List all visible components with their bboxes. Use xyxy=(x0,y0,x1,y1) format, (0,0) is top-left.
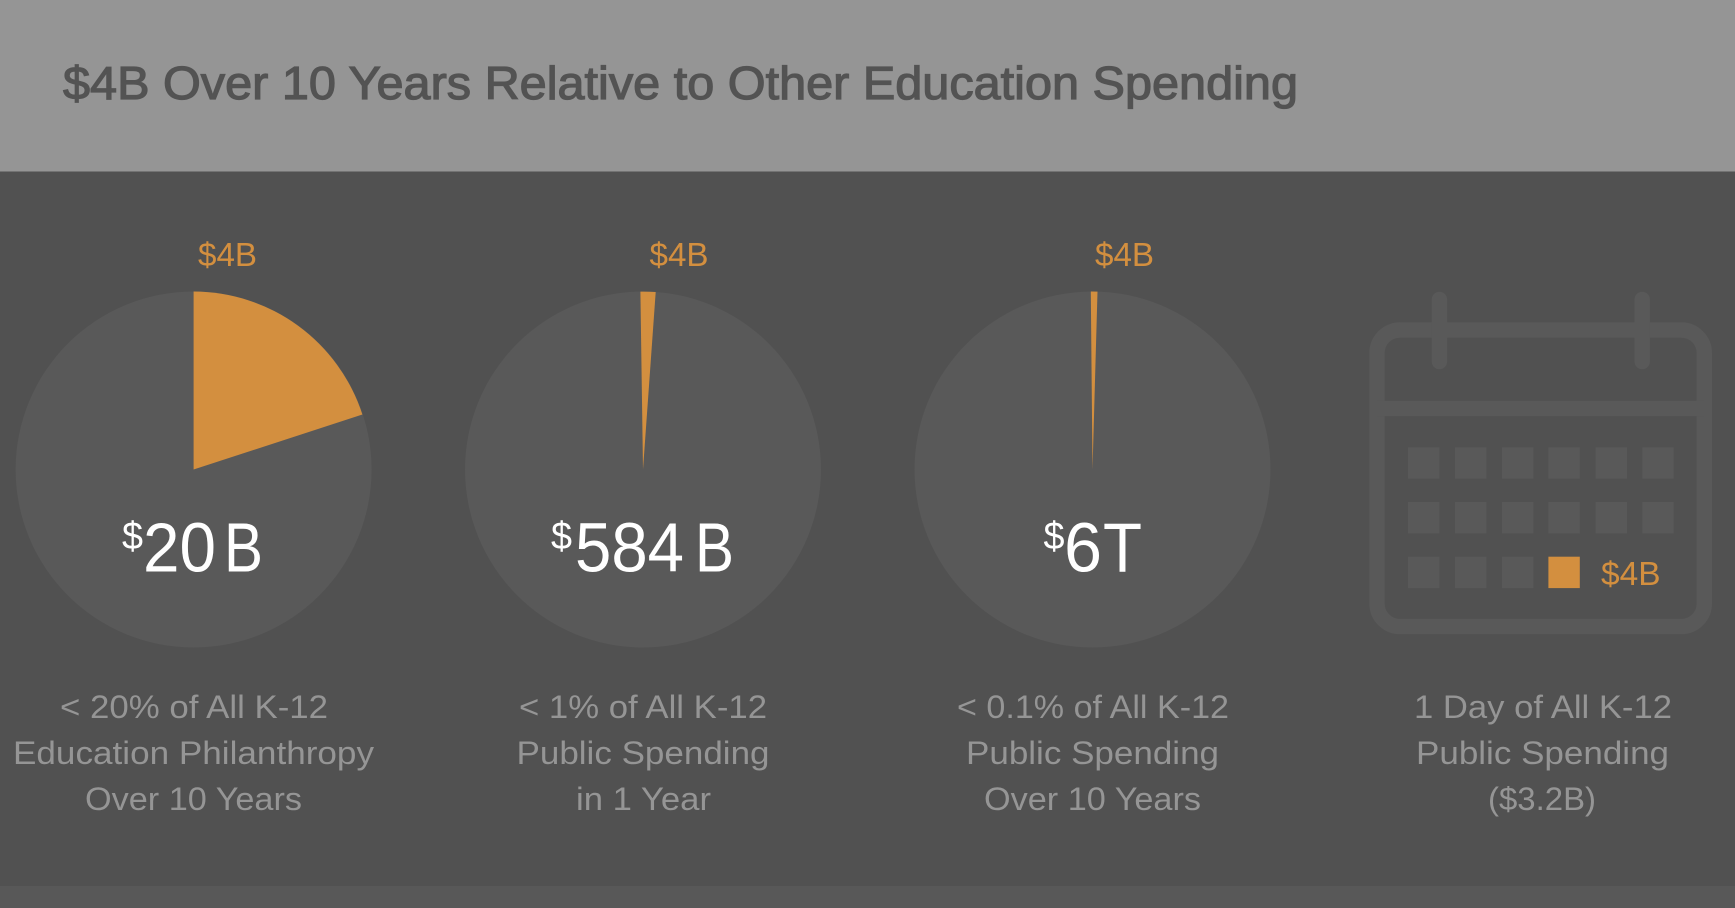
caption xyxy=(13,689,374,817)
value $584 B: $ xyxy=(551,515,572,558)
calendar day squares xyxy=(1408,447,1674,588)
value $584 B: B xyxy=(695,508,734,586)
panel: calendar xyxy=(1377,299,1704,817)
value $20 B: B xyxy=(224,508,263,586)
value $6T xyxy=(1044,508,1142,586)
$4B label: $4B xyxy=(650,236,708,273)
$4B label: $4B xyxy=(1601,555,1660,592)
caption: 1 Day of All K-12 xyxy=(1414,689,1672,725)
caption: Public Spending xyxy=(1416,735,1669,771)
pie base xyxy=(914,292,1270,648)
caption: Over 10 Years xyxy=(85,781,302,817)
panel: $20B pie chart xyxy=(13,236,374,817)
caption: < 1% of All K-12 xyxy=(519,689,767,725)
orange wedge 1% xyxy=(640,292,656,470)
$4B label: $4B xyxy=(1095,236,1154,273)
header band xyxy=(0,0,1735,172)
caption xyxy=(957,689,1229,817)
pie base xyxy=(16,292,372,648)
caption: < 20% of All K-12 xyxy=(60,689,328,725)
value $20 B: 20 xyxy=(143,508,216,586)
value $20 B xyxy=(122,508,263,586)
highlighted day square xyxy=(1548,557,1580,588)
value $584 B: 584 xyxy=(575,508,684,586)
panel: $584B pie chart xyxy=(465,236,821,817)
caption: < 0.1% of All K-12 xyxy=(957,689,1229,725)
caption: Public Spending xyxy=(966,735,1219,771)
value $584 B xyxy=(551,508,734,586)
caption: in 1 Year xyxy=(576,781,711,817)
value $6T: 6 xyxy=(1064,508,1102,586)
caption: Education Philanthropy xyxy=(13,735,374,771)
value $6T: T xyxy=(1103,508,1142,586)
$4B label: $4B xyxy=(198,236,257,273)
title: $4B Over 10 Years Relative to Other Education Spending xyxy=(63,57,1298,109)
icon: calendar frame xyxy=(1377,299,1704,627)
panel: $6T pie chart xyxy=(914,236,1270,817)
bottom band xyxy=(0,886,1735,908)
caption: Public Spending xyxy=(516,735,770,771)
orange wedge 0.1% xyxy=(1091,291,1098,470)
caption xyxy=(516,689,770,817)
value $6T: $ xyxy=(1044,515,1065,558)
value $20 B: $ xyxy=(122,515,143,558)
caption: ($3.2B) xyxy=(1488,781,1596,817)
background panel xyxy=(0,171,1735,886)
orange wedge 20% xyxy=(194,292,362,470)
caption: Over 10 Years xyxy=(984,781,1201,817)
pie base xyxy=(465,292,821,648)
caption xyxy=(1414,689,1672,817)
